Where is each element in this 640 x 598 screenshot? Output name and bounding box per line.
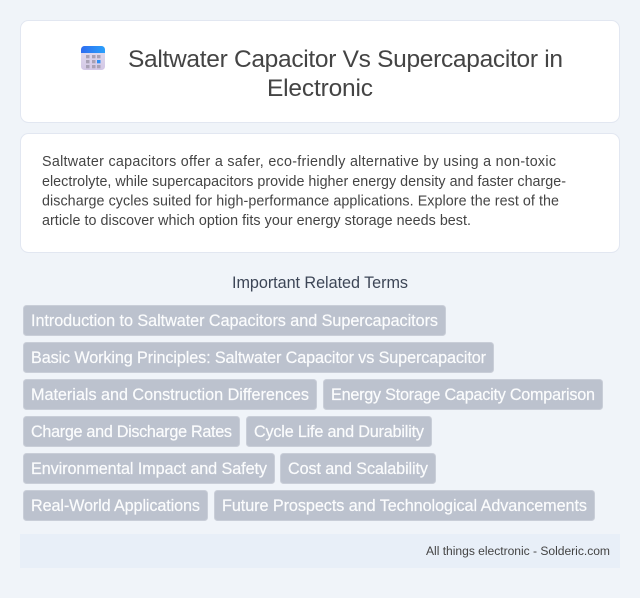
title: Saltwater Capacitor Vs Supercapacitor in	[128, 46, 563, 73]
chip: cycle life: Cycle Life and Durability	[254, 423, 425, 441]
chip: materials: Materials and Construction Differences	[31, 386, 309, 404]
chip: cost	[280, 454, 436, 484]
chip: cost: Cost and Scalability	[288, 460, 429, 478]
summary text	[42, 154, 566, 229]
chip: introduction	[24, 306, 446, 336]
chip: real-world	[24, 490, 208, 520]
title	[128, 46, 563, 102]
chip: energy storage	[324, 380, 602, 410]
footer: All things electronic - Solderic.com	[426, 544, 610, 558]
summary text: Saltwater capacitors offer a safer, eco-friendly alternative by using a non-toxic	[42, 154, 556, 170]
panel: title card	[20, 20, 620, 122]
chip: cycle life	[246, 416, 432, 446]
panel: summary paragraph	[20, 134, 620, 252]
chip: future prospects	[214, 490, 594, 520]
title: Electronic	[267, 75, 373, 102]
chip: introduction: Introduction to Saltwater Capacitors and Supercapacitors	[31, 312, 438, 330]
chip: environmental: Environmental Impact and Safety	[31, 460, 268, 478]
chip: energy storage: Energy Storage Capacity Comparison	[331, 386, 595, 404]
summary text: discharge cycles suited for high-performance applications. Explore the rest of the	[42, 194, 559, 210]
chip: real-world: Real-World Applications	[31, 497, 200, 515]
footer	[20, 534, 620, 568]
term chips	[24, 306, 602, 520]
chip: charge and discharge	[24, 416, 240, 446]
chip: environmental	[24, 454, 274, 484]
chip: future prospects: Future Prospects and Technological Advancements	[222, 497, 587, 515]
icon: calendar	[81, 46, 105, 70]
chip: charge and discharge: Charge and Discharge Rates	[31, 423, 232, 441]
chip: basic working principles	[24, 342, 494, 372]
heading: important related terms: Important Related Terms	[232, 274, 408, 292]
summary text: article to discover which option fits your energy storage needs best.	[42, 213, 471, 229]
chip: basic working principles: Basic Working Principles: Saltwater Capacitor vs Supercapacitor	[31, 349, 487, 367]
summary text: electrolyte, while supercapacitors provide higher energy density and faster charge-	[42, 174, 566, 190]
chip: materials	[24, 380, 316, 410]
